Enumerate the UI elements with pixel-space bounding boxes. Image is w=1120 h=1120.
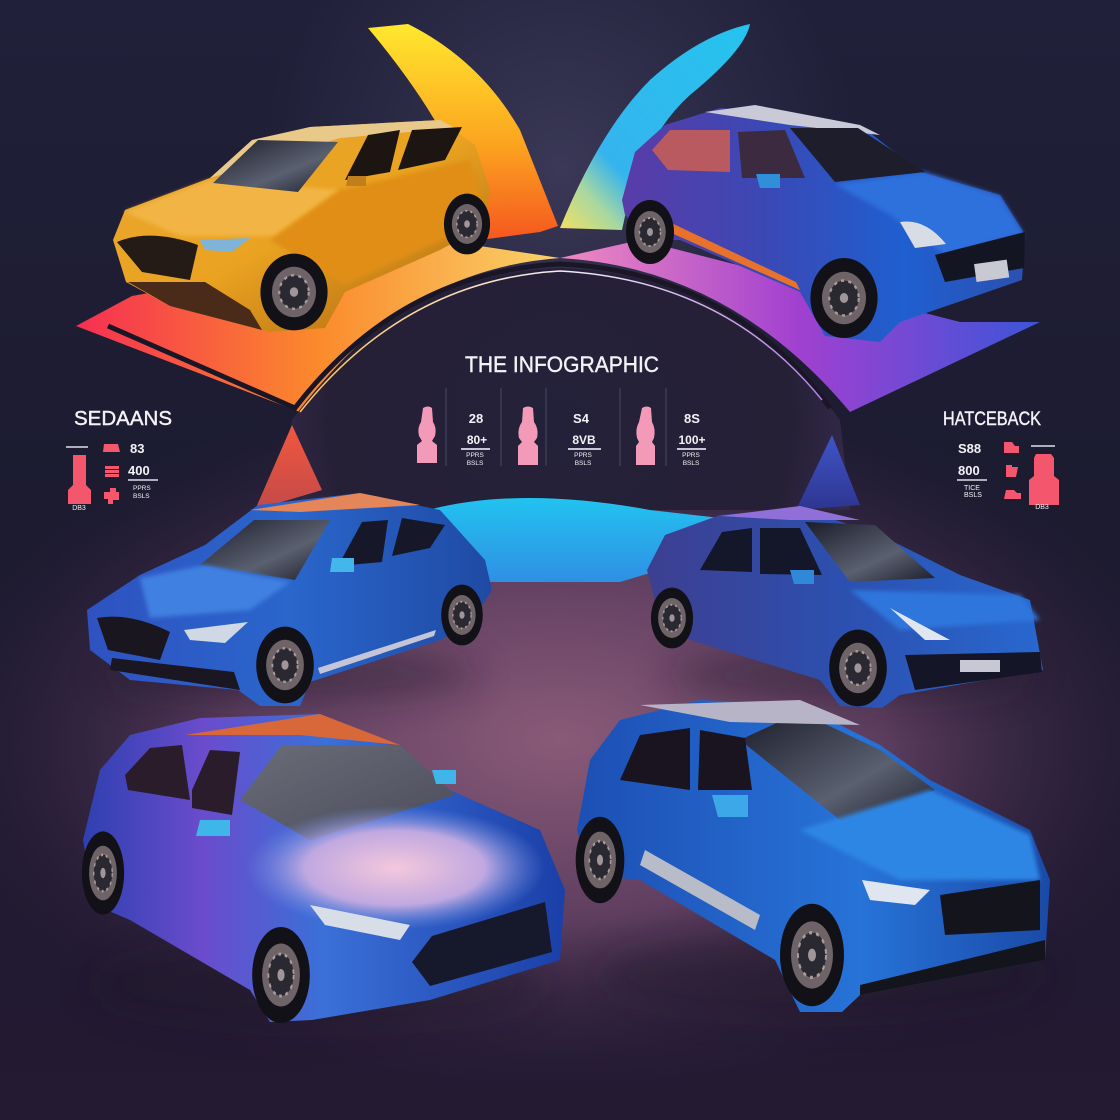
stat 2: 8VB xyxy=(572,433,596,447)
stat 3: PPRS xyxy=(682,452,701,459)
stat 3: 100+ xyxy=(678,433,706,447)
panel: hatchback stats xyxy=(943,409,1059,511)
stat 1 xyxy=(461,411,490,467)
stat 1: 28 xyxy=(469,411,483,426)
car: gold SUV xyxy=(113,120,490,332)
panel: left floor arc xyxy=(76,240,560,412)
panel: sedans stats: DB3 xyxy=(72,505,86,512)
stat 1: PPRS xyxy=(466,452,485,459)
central dome xyxy=(282,268,850,510)
car: purple-blue SUV xyxy=(622,105,1025,342)
panel: sedans stats: 83 xyxy=(130,441,144,456)
panel: hatchback stats: DB3 xyxy=(1035,504,1049,511)
panel: hatchback stats: 800 xyxy=(958,463,980,478)
car: blue SUV bottom right xyxy=(576,700,1050,1012)
stat 2: PPRS xyxy=(574,452,593,459)
icon: pink figure 2 xyxy=(518,406,538,465)
stats: center xyxy=(417,388,706,467)
stat 2: S4 xyxy=(573,411,590,426)
arc outline xyxy=(108,264,830,408)
panel: sedans stats: PPRS xyxy=(133,485,151,492)
panel: blue angled backdrop xyxy=(560,24,750,230)
stat 2 xyxy=(568,411,601,467)
panel: hatchback stats: BSLS xyxy=(964,492,982,499)
panel: sedans stats: 400 xyxy=(128,463,150,478)
car: iridescent sedan bottom left xyxy=(82,714,565,1023)
stat 3 xyxy=(677,411,706,467)
stat 1: 80+ xyxy=(467,433,487,447)
car: blue hatchback mid left xyxy=(87,493,492,706)
beam: right xyxy=(796,435,860,510)
title: THE INFOGRAPHIC xyxy=(465,352,659,377)
floor shadows xyxy=(90,647,1045,1025)
dividers xyxy=(446,388,666,466)
panel: hatchback stats: TICE xyxy=(964,485,980,492)
car: blue sedan mid right xyxy=(647,506,1043,708)
panel: right floor arc xyxy=(560,240,1040,412)
icon: red column right xyxy=(1029,454,1059,505)
icon: pink figure 1 xyxy=(417,406,437,463)
stat 3: 8S xyxy=(684,411,700,426)
heading: hatchback: HATCEBACK xyxy=(943,409,1041,430)
icon: pink figure 3 xyxy=(636,406,655,465)
stat 3: BSLS xyxy=(683,460,700,467)
stat 1: BSLS xyxy=(467,460,484,467)
beam: left xyxy=(255,425,322,510)
icon: red column xyxy=(68,455,91,504)
cyan arch xyxy=(428,498,720,582)
panel: yellow angled backdrop xyxy=(368,24,558,240)
heading: sedans: SEDAANS xyxy=(74,408,172,430)
stat 2: BSLS xyxy=(575,460,592,467)
arc highlight xyxy=(300,271,822,412)
panel: sedans stats: BSLS xyxy=(133,493,150,500)
panel: sedans stats xyxy=(66,408,172,512)
panel: hatchback stats: S88 xyxy=(958,441,981,456)
